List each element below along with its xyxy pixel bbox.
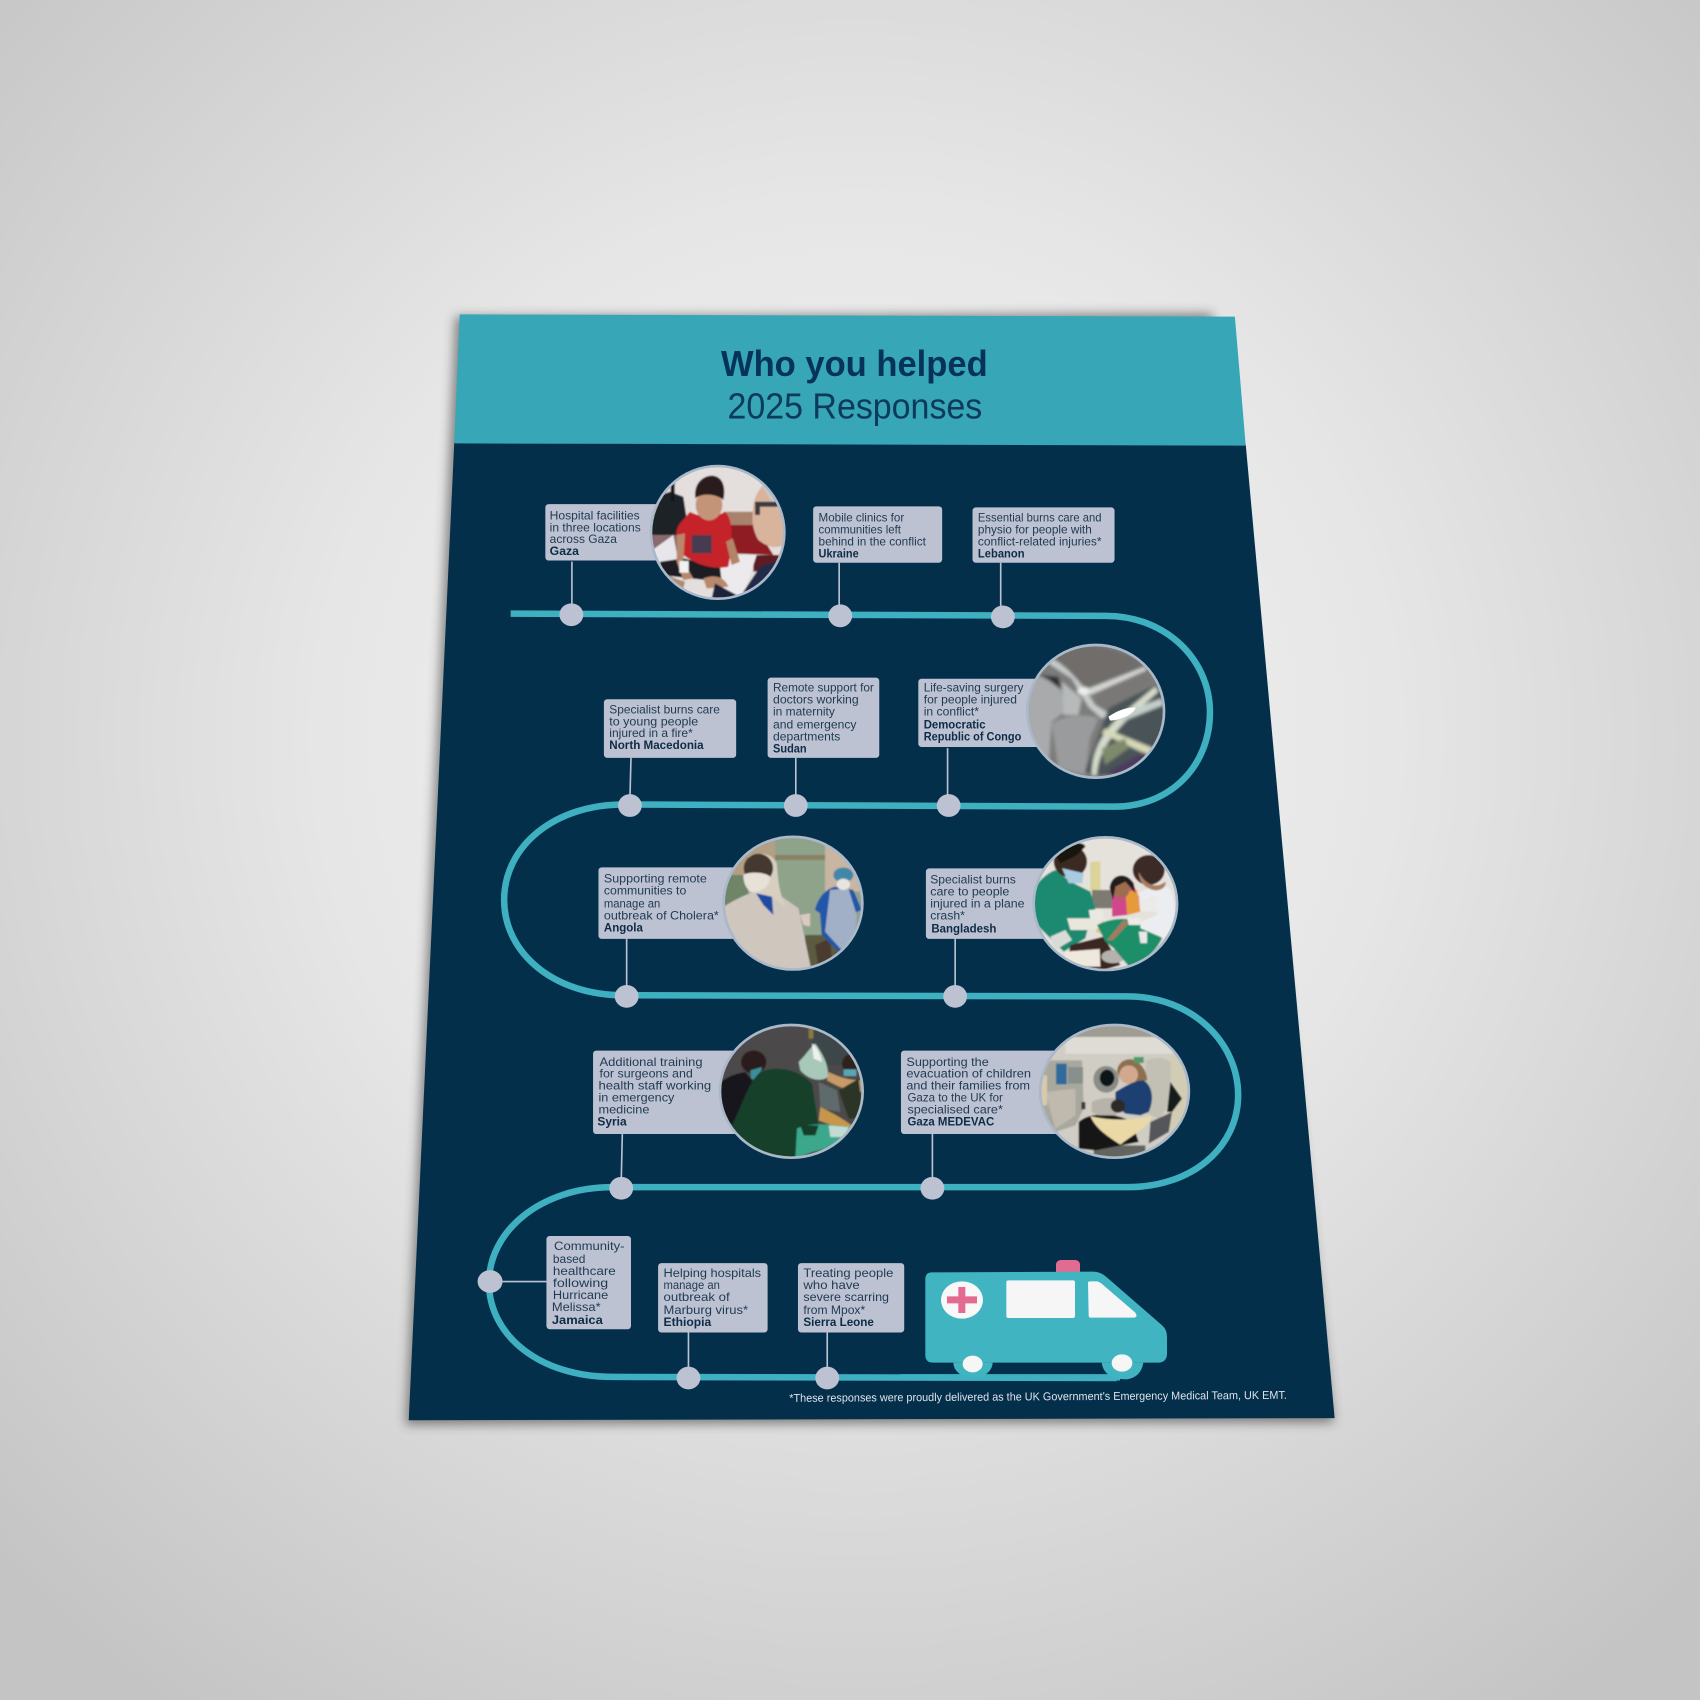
implant highlight — [1108, 708, 1136, 721]
callout: Jamaica: healthcare — [553, 1264, 616, 1278]
windscreen — [1088, 1281, 1137, 1318]
callout: Jamaica — [546, 1236, 631, 1329]
callout: Sierra Leone: Treating people — [803, 1266, 894, 1280]
callout: Angola: manage an — [604, 896, 660, 910]
callout: Democratic Republic of Congo: Democratic — [924, 718, 986, 732]
callout: Gaza MEDEVAC: Gaza MEDEVAC — [907, 1114, 994, 1128]
callout: Sudan: doctors working — [773, 693, 859, 707]
callout: Sudan: Sudan — [773, 741, 807, 755]
poster — [409, 314, 1335, 1420]
photo ring — [724, 837, 862, 969]
timeline route — [489, 614, 1238, 1378]
callout: Gaza MEDEVAC: and their families from — [906, 1079, 1030, 1093]
callout: Ethiopia — [658, 1263, 768, 1332]
callout: Lebanon: Lebanon — [978, 546, 1025, 560]
photo: boy in red shirt, Gaza — [650, 464, 786, 600]
callout: Syria: Syria — [597, 1114, 627, 1128]
callout: Syria: Additional training — [600, 1055, 703, 1069]
callout: Bangladesh: crash* — [930, 908, 965, 922]
callout: Sierra Leone: from Mpox* — [803, 1303, 865, 1317]
callout: Sierra Leone: Sierra Leone — [803, 1315, 874, 1329]
callout: Jamaica: Jamaica — [552, 1313, 603, 1327]
callout: Jamaica: Community- — [554, 1239, 624, 1253]
callout: Ethiopia: outbreak of — [664, 1290, 730, 1304]
callout: Jamaica: based — [553, 1252, 586, 1266]
photo: medevac flight, Gaza — [1039, 1024, 1190, 1159]
poster shadow — [405, 313, 1334, 1425]
callout: Sierra Leone: severe scarring — [803, 1290, 889, 1304]
callout: Gaza MEDEVAC: specialised care* — [907, 1102, 1003, 1116]
callout: Ukraine — [813, 506, 942, 563]
callout: Lebanon: physio for people with — [978, 522, 1092, 536]
callout: Ethiopia: Ethiopia — [664, 1315, 711, 1329]
footnote: *These responses were proudly delivered as the UK Government's Emergency Medical Team, UK EMT. — [789, 1390, 1287, 1405]
panel: teal header — [454, 314, 1246, 446]
photo: surgeons training, Syria — [718, 1024, 864, 1159]
callout: Ethiopia: Helping hospitals — [664, 1266, 761, 1280]
callout: Gaza MEDEVAC: Supporting the — [906, 1055, 989, 1069]
callout: Syria: medicine — [598, 1102, 650, 1116]
callout: Sierra Leone — [798, 1263, 904, 1332]
callout: Syria — [593, 1051, 739, 1134]
callout: Jamaica: Melissa* — [552, 1300, 601, 1314]
callout: North Macedonia: North Macedonia — [609, 738, 704, 752]
callout: Sudan: and emergency — [773, 718, 857, 732]
callout: Ukraine: Mobile clinics for — [819, 510, 904, 524]
callout: Bangladesh: care to people — [930, 885, 1010, 899]
callout: Syria: in emergency — [598, 1091, 675, 1105]
callout: Bangladesh: injured in a plane — [930, 896, 1025, 910]
panel: navy body — [409, 442, 1335, 1420]
callout: Ethiopia: manage an — [664, 1278, 720, 1292]
photo ring — [720, 1025, 863, 1158]
callout: Bangladesh — [926, 868, 1047, 939]
subtitle: 2025 Responses — [727, 386, 982, 426]
callout: Gaza MEDEVAC: evacuation of children — [906, 1067, 1031, 1081]
connector lines — [501, 562, 1001, 1371]
callout: North Macedonia: injured in a fire* — [609, 726, 693, 740]
callout: Ethiopia: Marburg virus* — [664, 1303, 748, 1317]
callout: North Macedonia: to young people — [609, 714, 698, 728]
callout: Jamaica: Hurricane — [553, 1288, 608, 1302]
callout: Lebanon: Essential burns care and — [978, 510, 1102, 524]
callout: Democratic Republic of Congo: Republic of Congo — [924, 729, 1021, 743]
callout: Angola: Supporting remote — [604, 872, 707, 886]
photo ring — [1034, 837, 1177, 970]
heading — [721, 344, 988, 426]
callout: North Macedonia — [604, 699, 736, 758]
road end joining wheel — [900, 1368, 1120, 1387]
callout: Democratic Republic of Congo: in conflict* — [924, 705, 979, 719]
siren — [1056, 1260, 1080, 1277]
callout: Bangladesh: Specialist burns — [930, 873, 1016, 887]
callout: Gaza MEDEVAC: Gaza to the UK for — [907, 1091, 1003, 1105]
photo ring — [1040, 1025, 1189, 1158]
callout: Syria: health staff working — [598, 1079, 711, 1093]
callout: Ukraine: Ukraine — [819, 546, 859, 560]
callout: Gaza: across Gaza — [550, 532, 617, 546]
callout: Angola: communities to — [604, 883, 686, 897]
photo: x-ray, Democratic Republic of Congo — [1026, 644, 1166, 779]
cross badge — [941, 1281, 983, 1319]
callout: Gaza: Hospital facilities — [550, 508, 640, 522]
photo: health workers, Angola — [722, 836, 864, 971]
timeline nodes — [478, 603, 1015, 1389]
callout: Lebanon — [973, 507, 1115, 563]
photo: burns care team, Bangladesh — [1032, 836, 1178, 972]
callout: Sudan — [768, 678, 879, 758]
callout: Democratic Republic of Congo — [918, 679, 1054, 747]
callout: Sudan: departments — [773, 729, 840, 743]
callout: Gaza: in three locations — [550, 520, 641, 534]
callout: Jamaica: following — [553, 1276, 608, 1290]
callout: Syria: for surgeons and — [600, 1067, 693, 1081]
callout: Sierra Leone: who have — [802, 1278, 860, 1292]
callout: Angola: outbreak of Cholera* — [604, 908, 719, 922]
title: Who you helped — [721, 344, 988, 384]
callout: North Macedonia: Specialist burns care — [609, 702, 720, 716]
photo ring — [651, 466, 784, 599]
callout: Gaza — [545, 504, 665, 561]
callout: Angola — [598, 867, 745, 939]
callout: Bangladesh: Bangladesh — [931, 921, 996, 935]
callout: Lebanon: conflict-related injuries* — [978, 534, 1102, 548]
rear wheel — [953, 1363, 993, 1378]
van body — [925, 1272, 1167, 1363]
callout: Angola: Angola — [604, 920, 643, 934]
callout: Gaza MEDEVAC — [901, 1051, 1064, 1134]
photo ring — [1027, 645, 1164, 778]
callout: Sudan: Remote support for — [773, 681, 874, 695]
callout: Democratic Republic of Congo: for people injured — [924, 693, 1017, 707]
icon: ambulance — [900, 1260, 1167, 1379]
callout: Ukraine: communities left — [819, 522, 901, 536]
callout: Sudan: in maternity — [773, 705, 836, 719]
callout: Ukraine: behind in the conflict — [819, 534, 926, 548]
side window — [1006, 1280, 1075, 1318]
front wheel — [1102, 1363, 1143, 1379]
callout: Gaza: Gaza — [550, 544, 579, 558]
callout: Democratic Republic of Congo: Life-saving surgery — [924, 681, 1024, 695]
